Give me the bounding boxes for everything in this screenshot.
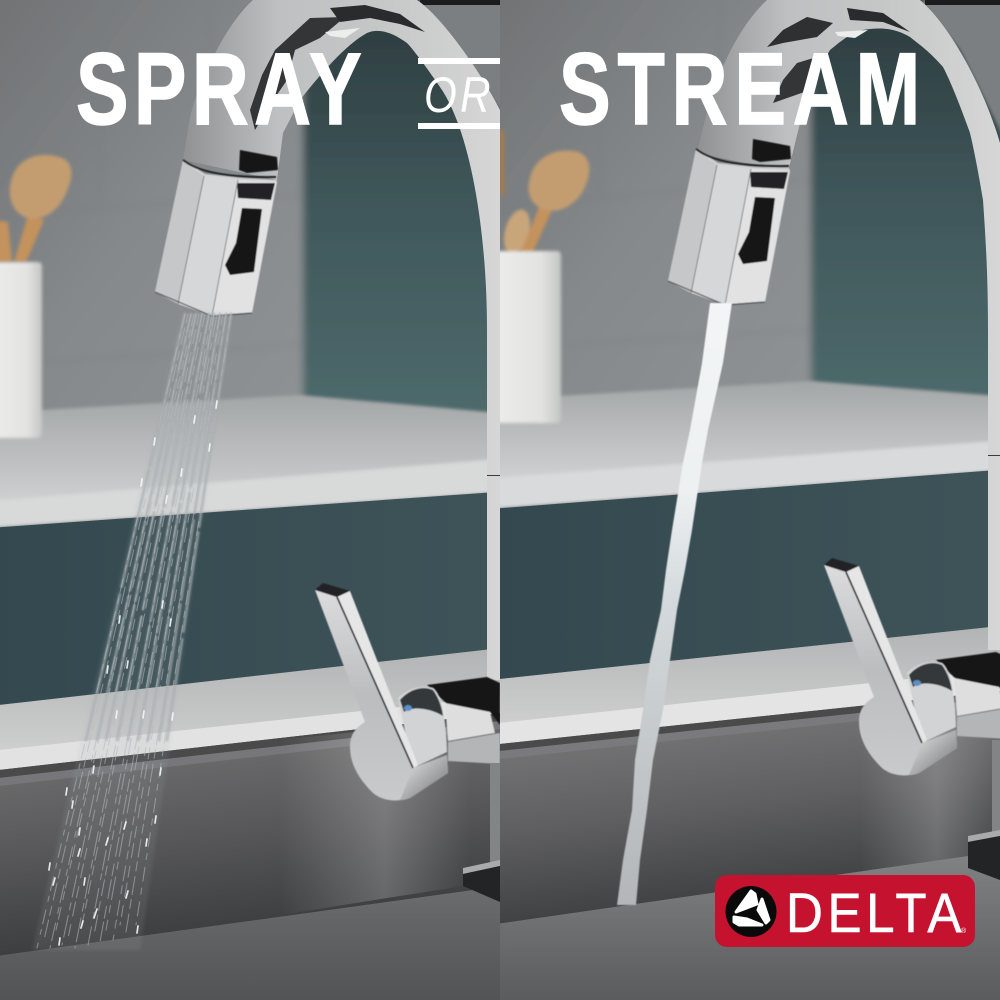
kitchen background: right — [490, 0, 1000, 1000]
heading: SPRAY: SPRAY — [76, 32, 367, 146]
Delta logo badge: ® — [961, 927, 967, 935]
panel: spray (left) — [0, 0, 510, 1000]
faucet post and base: left — [463, 763, 500, 902]
OR divider: OR — [424, 67, 494, 123]
spray head: right — [668, 139, 791, 305]
water stream — [617, 303, 732, 905]
Delta logo badge — [715, 875, 975, 947]
faucet arc: left — [183, 0, 510, 680]
water spray — [32, 312, 233, 950]
panel: stream (right) — [490, 0, 1000, 1000]
lever handle: right — [824, 558, 1000, 775]
cup and wooden spoons: right — [496, 130, 589, 423]
spray head: left — [155, 150, 278, 316]
OR divider — [418, 58, 500, 129]
kitchen background: left — [0, 0, 510, 1000]
lever handle: left — [315, 583, 500, 800]
cup and wooden spoon: left — [0, 155, 71, 438]
faucet post and base: right — [968, 740, 1000, 880]
Delta logo badge: DELTA — [786, 881, 966, 944]
faucet arc: right — [697, 0, 1000, 650]
